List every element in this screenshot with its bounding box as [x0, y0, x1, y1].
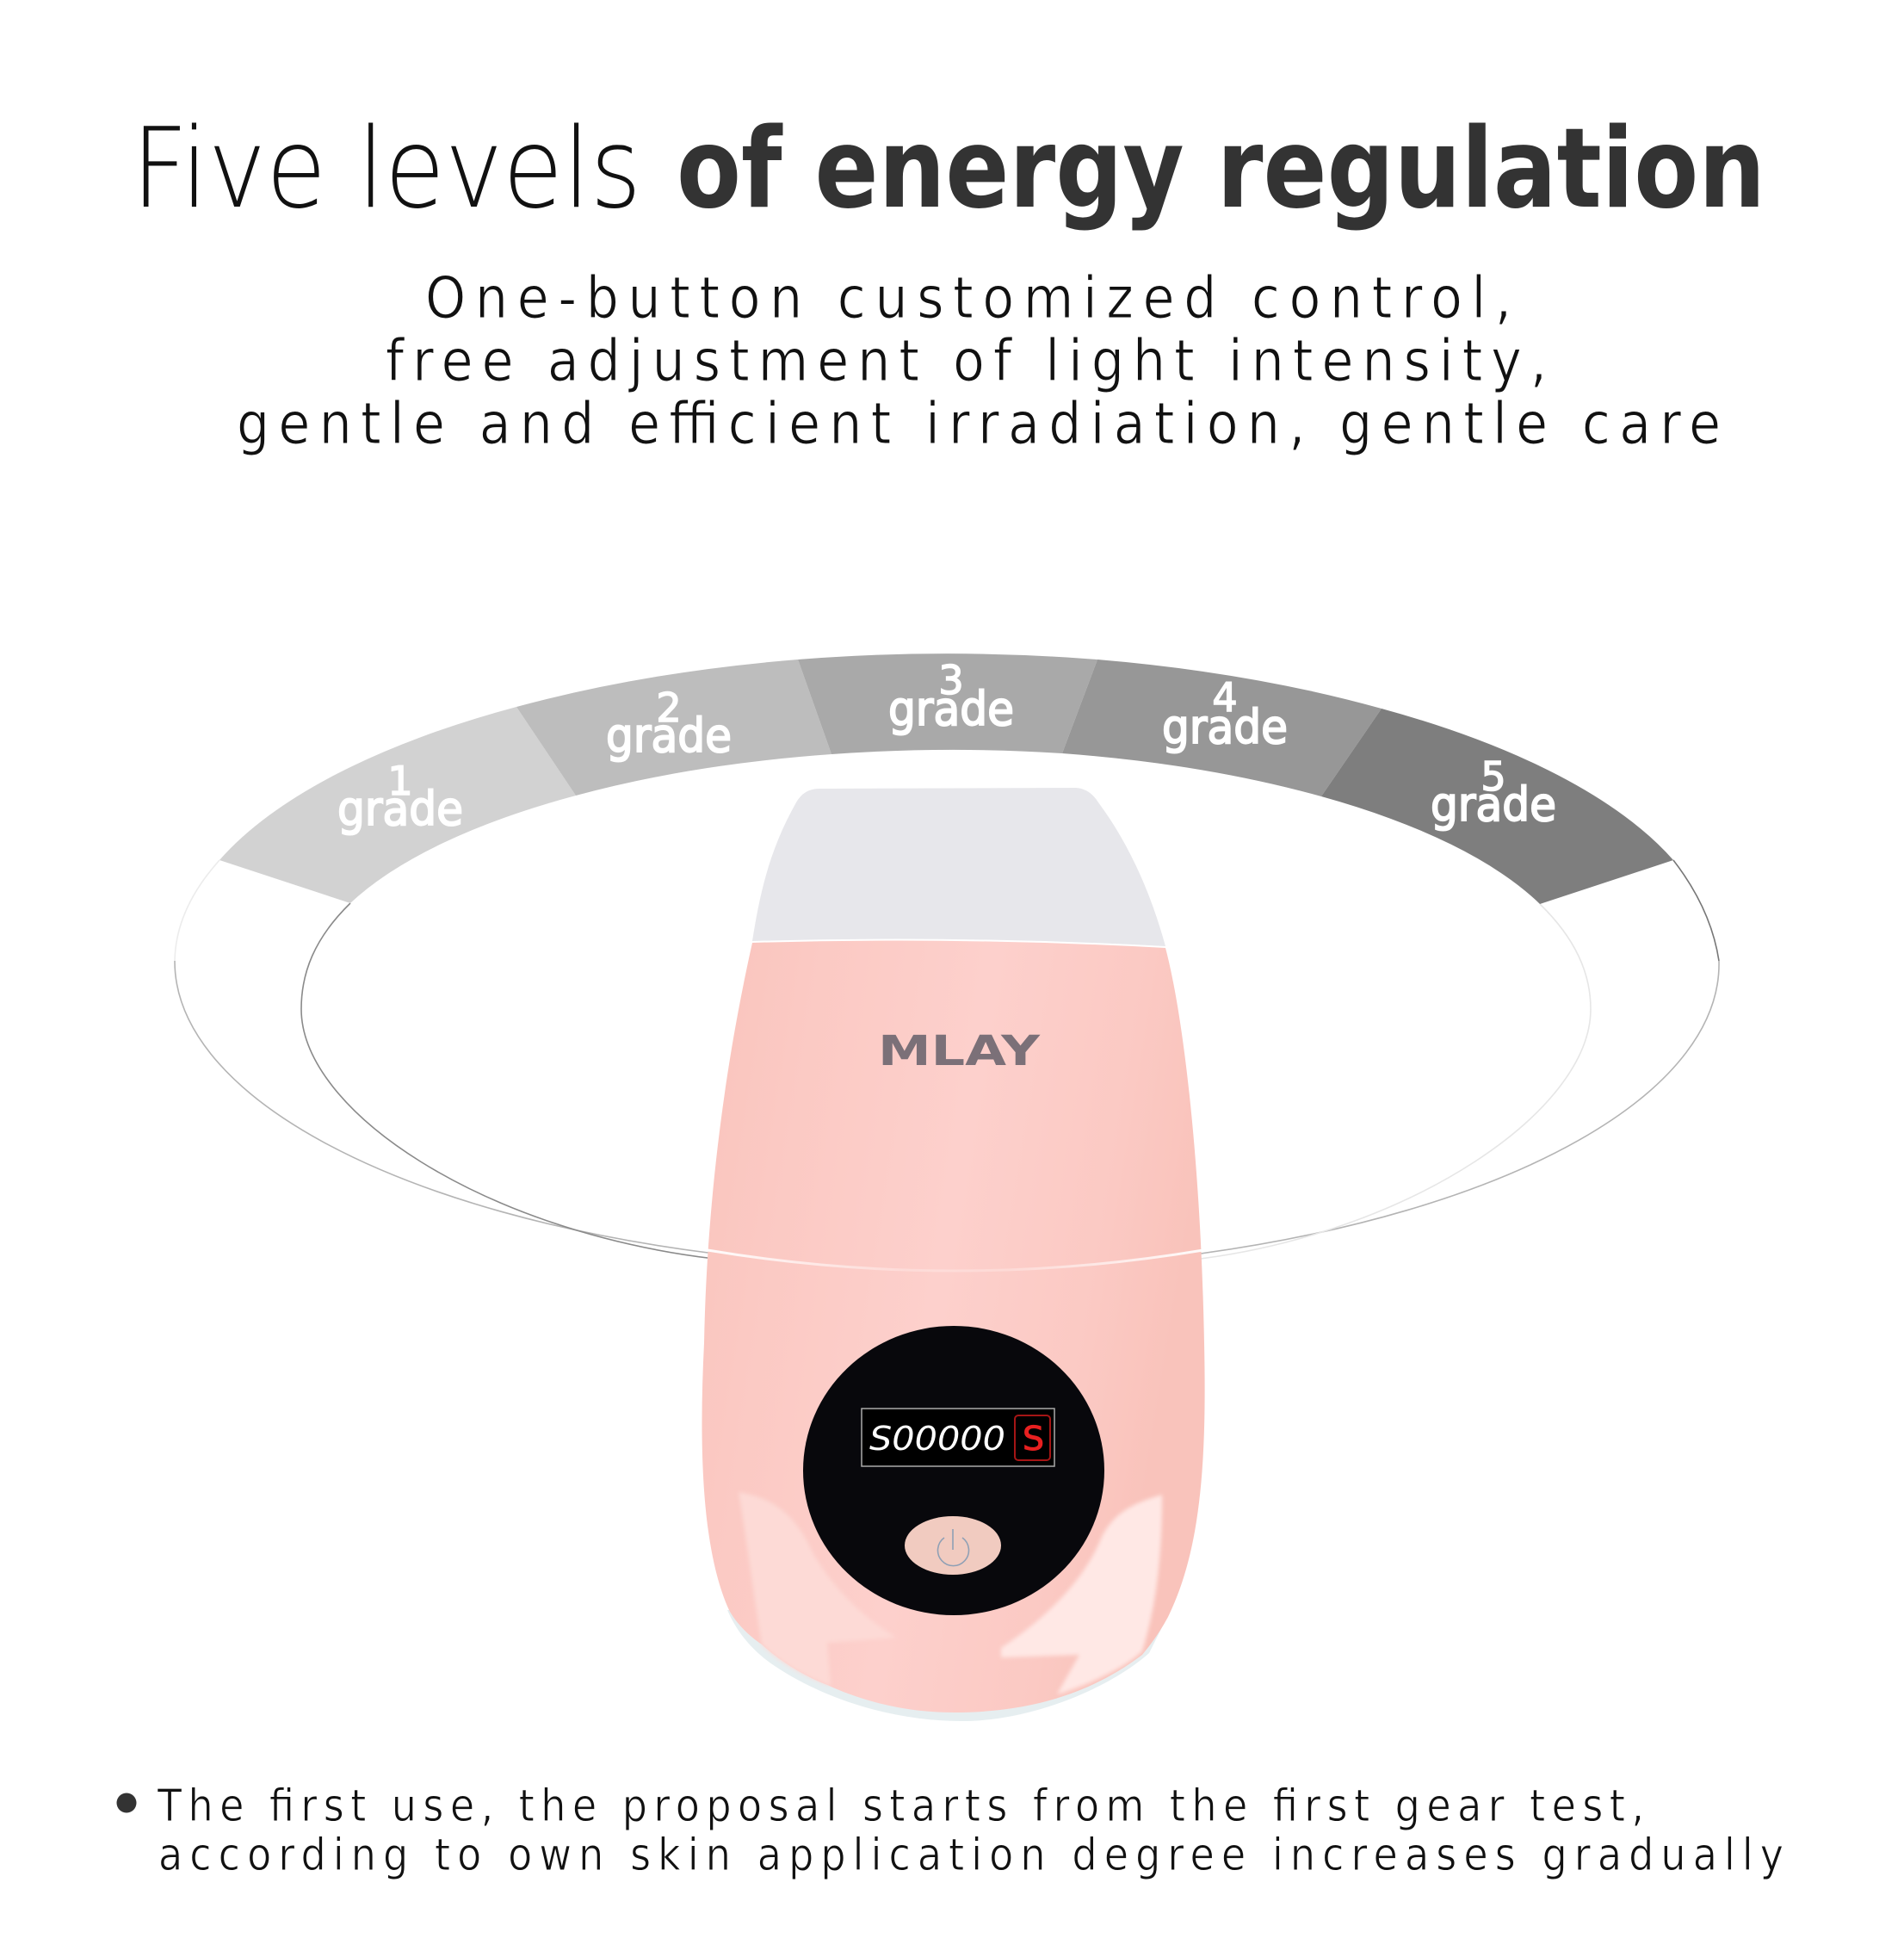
energy ring: five grade segments — [219, 653, 1673, 904]
segment: grade 5 — [1321, 709, 1673, 904]
power button — [905, 1516, 1001, 1575]
display digits: S00000 — [869, 1420, 1005, 1458]
subtitle: One-button customized control, — [425, 265, 1511, 332]
segment: grade 3 — [798, 653, 1097, 754]
segment: grade 2: 2 — [656, 684, 682, 731]
device base shell — [727, 1610, 1171, 1721]
grade indicator — [1015, 1415, 1050, 1460]
title: Five levels — [132, 105, 641, 233]
display window — [862, 1409, 1054, 1466]
right highlight — [1001, 1495, 1162, 1694]
segment: grade 5: 5 — [1481, 753, 1506, 800]
brand logo: MLAY — [878, 1027, 1042, 1075]
note — [117, 1780, 1783, 1881]
segment: grade 1: 1 — [387, 758, 413, 804]
segment: grade 4 — [1062, 660, 1382, 796]
thin ring outlines — [175, 860, 1719, 1259]
segment: grade 4: grade — [1162, 700, 1288, 754]
subtitle: free adjustment of light intensity, — [386, 328, 1547, 395]
left highlight — [739, 1492, 896, 1686]
segment: grade 1: grade — [337, 782, 463, 836]
segment: grade 3: 3 — [938, 657, 964, 703]
note text — [157, 1780, 1783, 1881]
segment: grade 3: grade — [888, 682, 1014, 736]
device: IPL handset — [702, 788, 1205, 1721]
segment: grade 2: grade — [606, 709, 732, 763]
segment: grade 4: 4 — [1212, 674, 1238, 721]
subtitle: gentle and efficient irradiation, gentle care — [237, 391, 1721, 458]
segment: grade 2 — [516, 660, 831, 796]
segment: grade 1 — [219, 707, 576, 903]
note text: The first use, the proposal starts from the first gear test, — [157, 1780, 1644, 1832]
device body — [702, 941, 1205, 1712]
note text: according to own skin application degree increases gradually — [158, 1830, 1783, 1881]
title — [132, 105, 1765, 233]
control panel — [803, 1326, 1104, 1615]
device head — [752, 788, 1165, 946]
subtitle — [237, 265, 1721, 458]
bullet — [117, 1793, 136, 1813]
grade indicator: S — [1023, 1420, 1044, 1458]
ring band across body — [708, 1250, 1203, 1271]
segment: grade 5: grade — [1431, 777, 1556, 832]
